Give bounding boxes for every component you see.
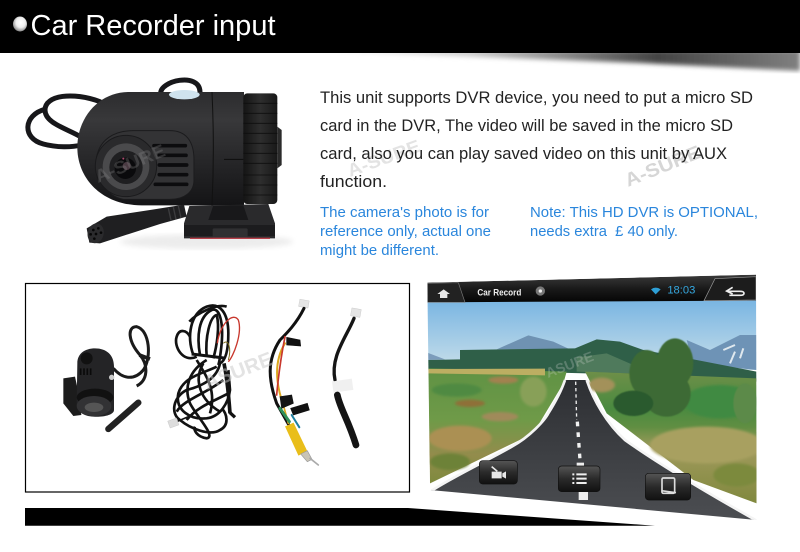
connector plug — [85, 205, 187, 245]
watermark: A-SURE left: A-SURE — [345, 136, 423, 181]
button: sd card — [645, 473, 691, 500]
paragraph: DVR description: card in the DVR, The video will be saved in the micro SD — [320, 116, 733, 135]
tree — [613, 338, 757, 423]
cable coil — [174, 306, 235, 438]
note: optional DVR price — [530, 205, 758, 240]
mountains — [427, 335, 757, 370]
title: Car Recorder input — [30, 10, 276, 42]
top bar: Car Record — [477, 287, 521, 297]
vents — [154, 146, 187, 184]
button: camera — [479, 461, 517, 484]
watermark: ASURE — [201, 348, 276, 395]
lens ring — [224, 93, 282, 204]
paragraph: DVR description: function. — [320, 172, 387, 191]
watermark: A-SURE right: A-SURE — [622, 142, 704, 192]
top bar — [427, 275, 756, 302]
paragraph: DVR description — [320, 88, 753, 191]
watermark: camera: A-SURE — [92, 140, 168, 187]
bullet icon — [13, 16, 27, 32]
photo: DVR camera — [28, 80, 293, 249]
camera body — [77, 92, 213, 205]
face plate — [96, 131, 194, 199]
note: optional DVR price: Note: This HD DVR is OPTIONAL, — [530, 205, 758, 221]
note: reference photo: reference only, actual one — [320, 224, 491, 240]
note: reference photo: might be different. — [320, 243, 439, 259]
panel: head unit screen — [420, 275, 763, 522]
mount — [184, 204, 275, 238]
aux adapter cable — [332, 308, 361, 445]
small camera — [63, 327, 150, 429]
header shadow — [290, 50, 800, 71]
panel: package contents — [26, 284, 410, 492]
note: optional DVR price: needs extra £ 40 only. — [530, 224, 678, 240]
lens — [95, 135, 157, 197]
watermark: screen: ASURE — [543, 348, 596, 381]
red wire loop — [217, 317, 239, 362]
left field — [428, 368, 567, 483]
video harness — [270, 299, 318, 465]
right field — [585, 372, 757, 503]
white plug — [168, 418, 179, 428]
paragraph: DVR description: This unit supports DVR device, you need to put a micro SD — [320, 88, 753, 107]
top bar: 18:03 — [667, 284, 695, 296]
forest hills — [427, 339, 757, 382]
paragraph: DVR description: card, also you can play saved video on this unit by AUX — [320, 144, 727, 163]
cable loops — [28, 80, 200, 147]
bottom bar — [25, 508, 655, 526]
note: reference photo: The camera's photo is for — [320, 205, 489, 221]
note: reference photo — [320, 205, 491, 259]
header bar — [0, 0, 800, 53]
road — [430, 380, 757, 522]
sky — [420, 300, 760, 370]
button: list — [558, 466, 600, 492]
sticker — [169, 90, 200, 99]
